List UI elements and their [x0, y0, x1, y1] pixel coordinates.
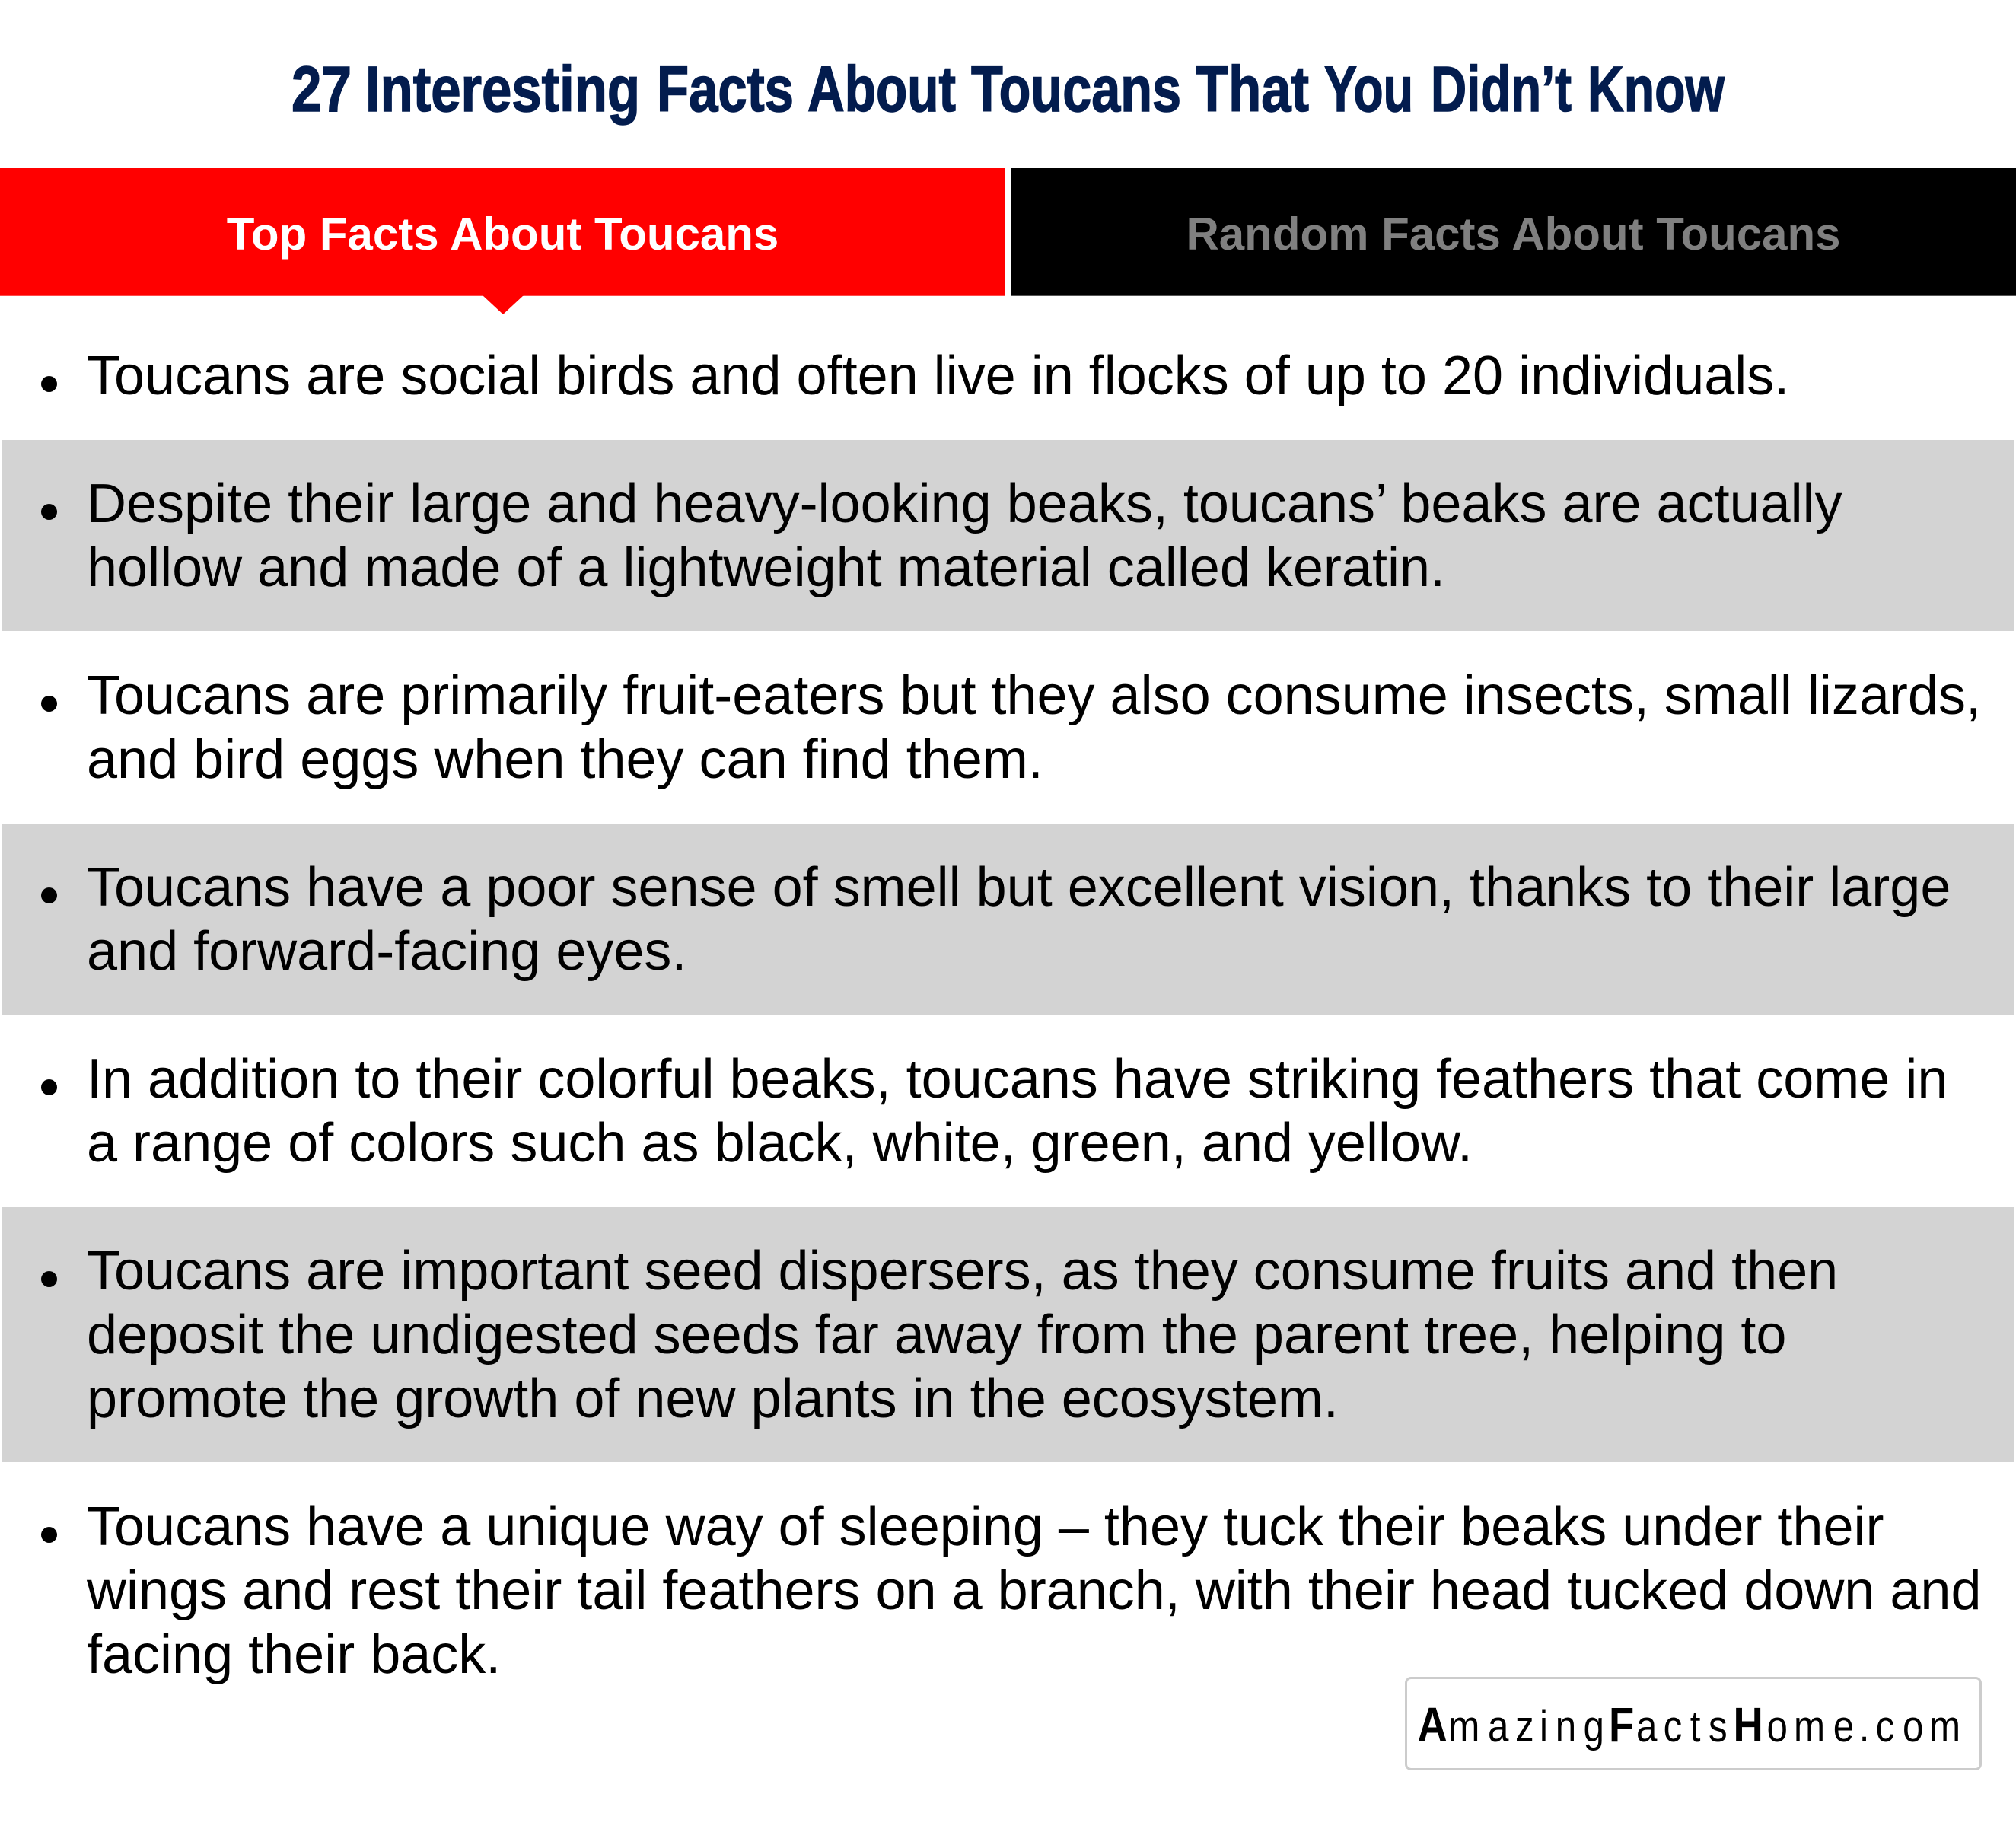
- fact 6 panel: promote the growth of new plants in the ecosystem.: [87, 1369, 1339, 1429]
- fact 4 panel: and forward-facing eyes.: [87, 921, 686, 982]
- fact 6 panel: [2, 1207, 2014, 1462]
- fact 7: Toucans have a unique way of sleeping – they tuck their beaks under their: [87, 1496, 1884, 1557]
- title: Facts: [657, 53, 794, 125]
- fact 3: Toucans are primarily fruit-eaters but they also consume insects, small lizards,: [87, 665, 1981, 726]
- title: About: [807, 53, 956, 125]
- tab: random facts: [1011, 168, 2016, 296]
- title: Toucans: [971, 53, 1181, 125]
- fact 3: and bird eggs when they can find them.: [87, 729, 1043, 790]
- fact 7: facing their back.: [87, 1624, 501, 1685]
- title: Know: [1588, 53, 1725, 125]
- fact 7: [41, 1496, 1981, 1685]
- title: [291, 53, 1725, 126]
- fact 6 panel: deposit the undigested seeds far away from the parent tree, helping to: [87, 1305, 1786, 1365]
- tab: top facts: [0, 168, 1005, 296]
- title: Didn’t: [1431, 53, 1572, 125]
- fact 2 panel: [2, 440, 2014, 631]
- title: That: [1196, 53, 1309, 125]
- fact 4 panel: Toucans have a poor sense of smell but excellent vision, thanks to their large: [87, 857, 1951, 918]
- title: 27: [291, 53, 352, 125]
- fact 5: a range of colors such as black, white, green, and yellow.: [87, 1113, 1473, 1174]
- fact 2 panel: hollow and made of a lightweight material called keratin.: [87, 537, 1445, 598]
- fact 1: Toucans are social birds and often live in flocks of up to 20 individuals.: [87, 346, 1789, 406]
- fact 6 panel: Toucans are important seed dispersers, as they consume fruits and then: [87, 1241, 1838, 1302]
- fact 5: In addition to their colorful beaks, toucans have striking feathers that come in: [87, 1049, 1948, 1110]
- watermark: AmazingFactsHome.com: [1405, 1677, 1982, 1770]
- fact 5: [41, 1049, 1948, 1174]
- fact 2 panel: Despite their large and heavy-looking beaks, toucans’ beaks are actually: [87, 473, 1842, 534]
- fact 7: wings and rest their tail feathers on a branch, with their head tucked down and: [87, 1560, 1981, 1621]
- tab arrow: [483, 295, 524, 314]
- fact 4 panel: [2, 824, 2014, 1015]
- fact 3: [41, 665, 1981, 790]
- title: Interesting: [365, 53, 640, 125]
- tab: top facts: Top Facts About Toucans: [227, 209, 779, 260]
- title: You: [1324, 53, 1413, 125]
- tab: random facts: Random Facts About Toucans: [1186, 209, 1841, 260]
- watermark: AmazingFactsHome.com: AmazingFactsHome.com: [1418, 1697, 1960, 1752]
